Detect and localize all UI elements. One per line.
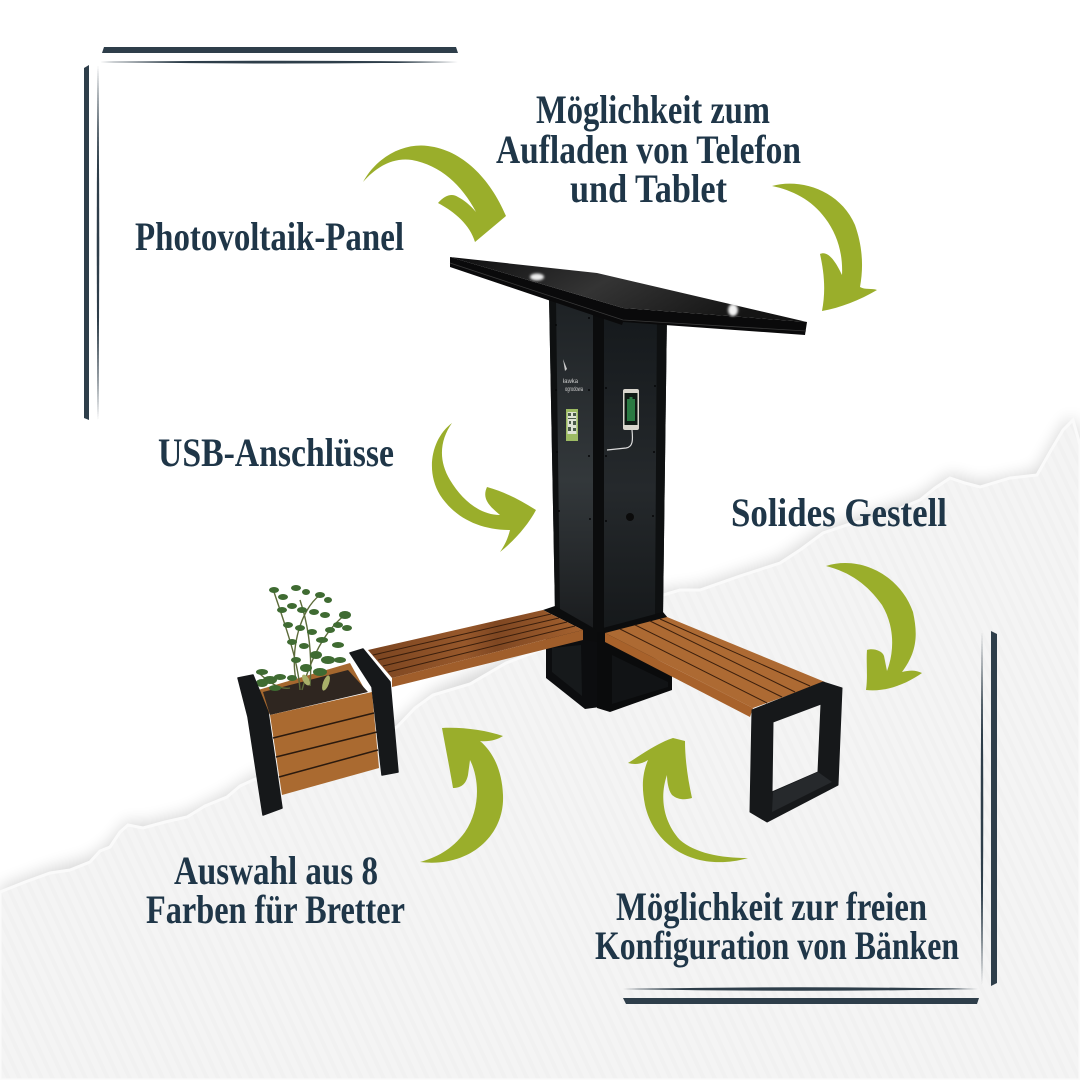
arrow: to planter boards: [420, 728, 503, 863]
product: planter box with plant: [238, 585, 398, 815]
arrow: to frame: [826, 563, 922, 690]
label: photovoltaic panel: Photovoltaik-Panel: [135, 214, 404, 259]
product: right bench: [603, 612, 842, 822]
label: USB ports: USB-Anschlüsse: [158, 430, 394, 475]
frame: top-left corner lines: [84, 47, 458, 420]
arrow: to USB ports: [432, 423, 536, 552]
arrow: to photovoltaic panel: [363, 146, 506, 242]
label: bench configuration: Möglichkeit zur freien: [616, 884, 927, 929]
label: phone and tablet charging: Aufladen von Telefon: [496, 127, 801, 172]
label and QR sticker on pillar: ławka: [563, 379, 579, 385]
product: left bench: [368, 606, 597, 687]
frame: bottom-right corner lines: [623, 631, 997, 1004]
label: phone and tablet charging: Möglichkeit zum: [536, 87, 770, 132]
label: bench configuration: [595, 884, 959, 968]
label: board colours: [146, 848, 405, 932]
label and QR sticker on pillar: [563, 359, 583, 441]
plant: [256, 585, 352, 692]
product: photovoltaic panel: [450, 257, 807, 335]
label: solid frame: Solides Gestell: [731, 490, 947, 535]
label and QR sticker on pillar: ogrodowa: [565, 387, 583, 393]
phone charging with cable: [607, 389, 639, 450]
label: phone and tablet charging: [496, 87, 801, 211]
arrow: to bench configuration: [628, 738, 748, 862]
label: bench configuration: Konfiguration von Bänken: [595, 923, 959, 968]
label: phone and tablet charging: und Tablet: [570, 166, 728, 211]
product: pillar base boxes: [546, 625, 672, 712]
label: board colours: Auswahl aus 8: [174, 848, 378, 893]
label: board colours: Farben für Bretter: [146, 887, 405, 932]
right bench metal frame: [750, 682, 842, 822]
product: pillar: [549, 296, 667, 632]
arrow: to phone charging: [772, 184, 877, 311]
